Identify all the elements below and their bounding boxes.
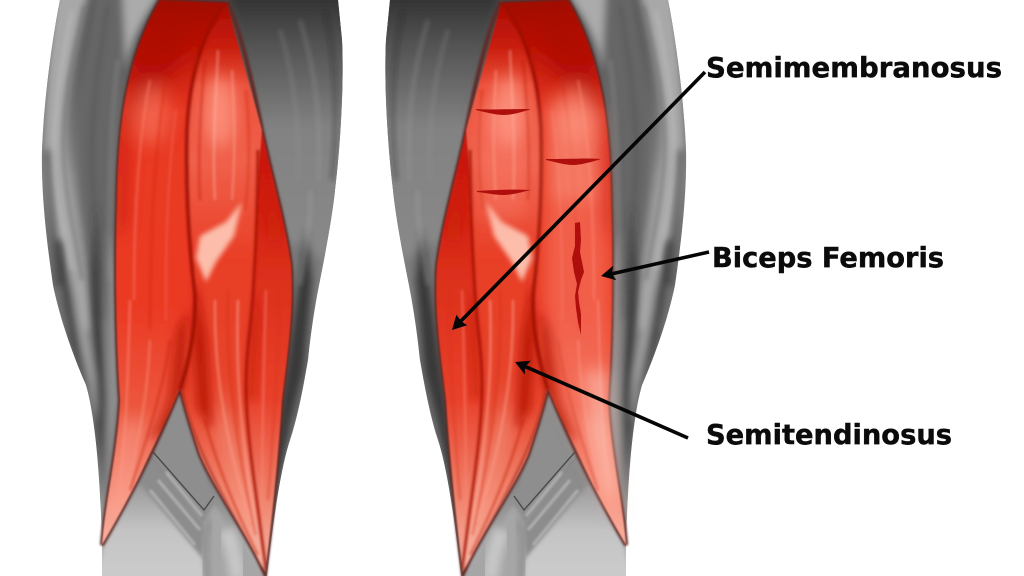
- arrow: Biceps Femoris: [601, 252, 709, 280]
- left leg: [30, 0, 360, 576]
- label: Semitendinosus: Semitendinosus: [706, 419, 952, 451]
- label: Semimembranosus: Semimembranosus: [706, 52, 1002, 84]
- arrow: Semitendinosus: [515, 361, 688, 438]
- tear: vertical: [572, 222, 584, 335]
- right leg with injured hamstring: [368, 0, 698, 576]
- tear: upper right: [546, 159, 601, 165]
- label: Biceps Femoris: Biceps Femoris: [712, 242, 944, 274]
- tear: upper left: [476, 109, 531, 115]
- arrow: Semimembranosus: [452, 72, 705, 330]
- lightening of biceps femoris: [478, 95, 620, 520]
- tear: middle: [477, 190, 531, 195]
